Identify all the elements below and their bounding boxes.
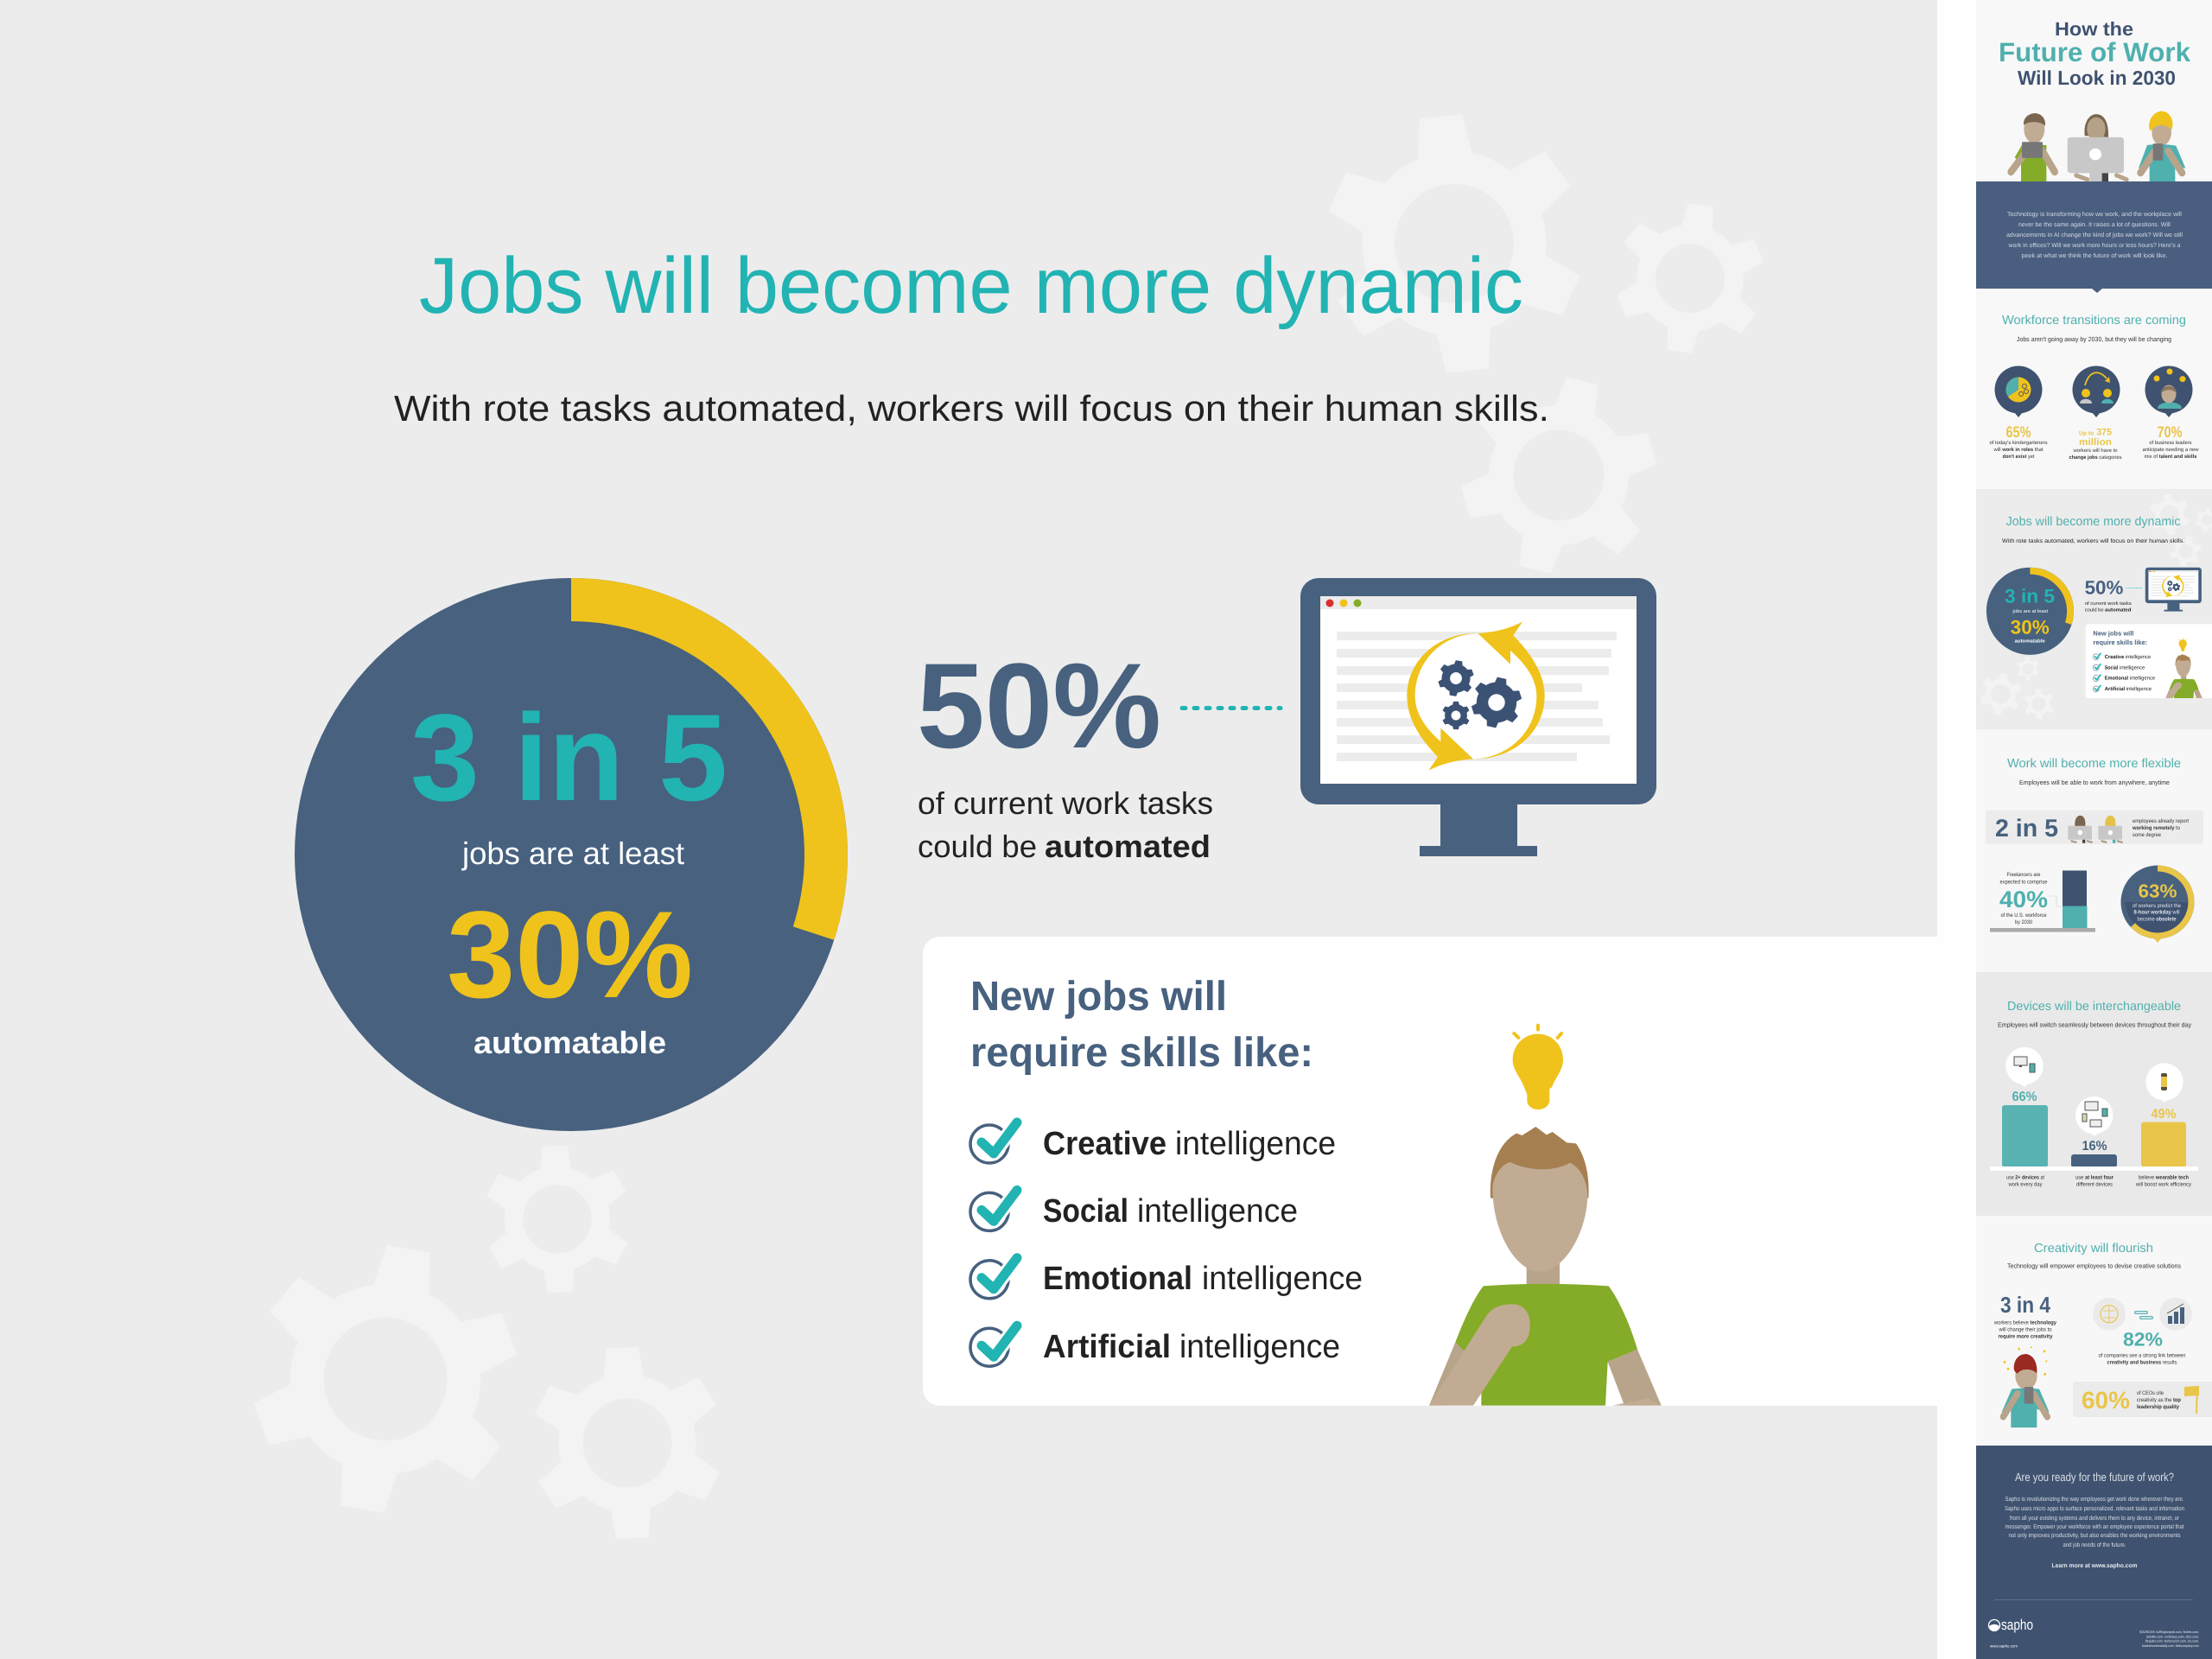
captions: devices: use at least four	[2075, 1175, 2113, 1181]
icon: monitor with gears	[1300, 578, 1656, 856]
donut: 3 in 5 jobs	[295, 578, 848, 1131]
stats: workforce: 65%	[2006, 423, 2031, 441]
icons: check marks	[970, 1122, 1017, 1366]
chart: freelancers 40%	[1990, 871, 2095, 932]
illustration: person with light bulb	[1429, 1026, 1662, 1406]
panel: footer call to action: Learn more at www.sapho.com	[2051, 1562, 2138, 1569]
skills list: Social	[1043, 1193, 1128, 1230]
title: Jobs will become more dynamic	[419, 242, 1523, 330]
stat: 50% automated: could be	[918, 829, 1037, 864]
donut text: jobs are at least	[461, 836, 684, 871]
donut text: automatable	[474, 1025, 666, 1060]
stat: 2 in 5 bar: some degree	[2133, 832, 2161, 838]
donut text: 30%	[447, 887, 693, 1024]
stats: workforce: anticipate needing a new	[2143, 447, 2199, 453]
captions: devices: work every day	[2008, 1182, 2043, 1187]
stat: 3 in 4	[1993, 1292, 2056, 1340]
stat: 82%: creativity and business results	[2107, 1360, 2177, 1365]
chart: freelancers 40%: of the U.S. workforce	[2001, 912, 2047, 918]
panel: thumbnail of dynamic jobs section: New jobs will	[2093, 630, 2133, 637]
stats: workforce: don't exist yet	[2003, 454, 2035, 460]
panel: thumbnail of dynamic jobs section: could be	[2085, 607, 2104, 613]
panel: intro text block: peek at what we think the future of work will look like.	[2022, 252, 2168, 259]
captions: devices: believe wearable tech	[2139, 1175, 2189, 1181]
chart: 63% ring: of workers predict the	[2133, 903, 2181, 909]
stat: 3 in 4: 3 in 4	[2000, 1292, 2050, 1318]
panel: intro text block: work in offices? Will we work more hours or less hours? Here's a	[2008, 242, 2181, 249]
panel: creativity will flourish: Technology will empower employees to devise creative solutions	[2007, 1262, 2181, 1270]
panel: footer call to action: Are you ready for the future of work?	[2015, 1471, 2174, 1484]
panel: work will become more flexible	[1976, 729, 2212, 972]
panel: intro text block	[1976, 181, 2212, 293]
stats: workforce: workers will have to	[2073, 448, 2118, 454]
stat: 60%: of CEOs cite	[2137, 1390, 2164, 1396]
panel: thumbnail of dynamic jobs section: Creative	[2105, 654, 2124, 660]
stats: workforce: 70%	[2157, 423, 2183, 441]
heading: new jobs will require skills: New jobs will	[970, 974, 1227, 1020]
background gears	[239, 104, 1770, 1543]
panel: thumbnail of dynamic jobs section: 30%	[2011, 616, 2050, 638]
captions: devices: use 2+ devices at	[2006, 1175, 2044, 1181]
panel: footer call to action	[1976, 1446, 2212, 1659]
stat: 2 in 5 bar	[1986, 810, 2203, 844]
panel: footer call to action: Sapho is revolutionizing the way employees get work done wherever they are.	[2005, 1496, 2184, 1503]
panel: thumbnail header and workforce section: How the	[2055, 18, 2133, 40]
icons: device bubbles	[2005, 1047, 2183, 1136]
panel: footer call to action: not only improves productivity, but also enables the working environments	[2008, 1532, 2181, 1539]
icon: job change bubble	[2072, 366, 2120, 417]
chart: freelancers 40%: Freelancers are	[2006, 872, 2041, 878]
chart: 63% ring: become obsolete	[2138, 917, 2177, 923]
panel: thumbnail of dynamic jobs section: 50%	[2085, 577, 2123, 598]
panel: footer call to action: and job needs of the future.	[2063, 1541, 2126, 1548]
stat: 50% automated	[917, 638, 1213, 864]
skills list: Artificial	[1043, 1329, 1171, 1365]
stat: 3 in 4: will change their jobs to	[1999, 1327, 2052, 1333]
white margin strip	[1937, 0, 1976, 1659]
bar chart: device usage: 16%	[2082, 1139, 2107, 1154]
stat: 2 in 5 bar: working remotely to	[2132, 825, 2180, 831]
chart: 63% ring: 8-hour workday will	[2134, 909, 2179, 916]
panel: devices will be interchangeable	[1976, 972, 2212, 1216]
illustration: creative woman	[2002, 1346, 2050, 1427]
stat: 60%: leadership quality	[2137, 1404, 2179, 1410]
panel: source infographic column	[1976, 0, 2212, 1659]
section: workforce transitions	[1989, 314, 2199, 461]
icons: brain, link, chart	[2093, 1298, 2192, 1331]
panel: thumbnail header and workforce section	[1976, 0, 2212, 489]
bar chart: device usage: 66%	[2012, 1090, 2037, 1104]
stat: 60%: 60%	[2082, 1387, 2130, 1414]
panel: thumbnail of dynamic jobs section: require skills like:	[2093, 639, 2147, 646]
sources: businessnewsdaily.com, fastcompany.com	[2142, 1643, 2200, 1648]
illustration: three workers	[2011, 111, 2185, 181]
panel: new jobs skills card	[923, 937, 2212, 1406]
donut text: 3 in 5	[410, 690, 728, 827]
panel: thumbnail of dynamic jobs section: With rote tasks automated, workers will focus on their human skills.	[2002, 537, 2184, 543]
panel: thumbnail of dynamic jobs section: Artificial	[2105, 686, 2125, 692]
skills list: intelligence	[1175, 1126, 1336, 1162]
stat: 82%: of companies see a strong link between	[2098, 1353, 2186, 1359]
heading: new jobs will require skills: require skills like:	[970, 1030, 1313, 1076]
stat: 3 in 4: require more creativity	[1998, 1334, 2053, 1340]
panel: thumbnail of dynamic jobs section: Jobs will become more dynamic	[2006, 514, 2181, 528]
panel: devices will be interchangeable: Devices will be interchangeable	[2007, 1000, 2181, 1014]
panel: thumbnail header and workforce section: Future of Work	[1999, 37, 2191, 67]
panel: intro text block: Technology is transforming how we work, and the workplace will	[2007, 211, 2182, 218]
stat: 2 in 5 bar: 2 in 5	[1995, 815, 2058, 842]
stat: 50% automated: automated	[1045, 829, 1211, 864]
panel: footer call to action: from all your existing systems and delivers them to any device, intranet, or	[2010, 1515, 2180, 1522]
panel: thumbnail of dynamic jobs section: 3 in 5	[2005, 585, 2055, 607]
panel: work will become more flexible: Employees will be able to work from anywhere, anytime	[2019, 779, 2170, 786]
panel: intro text block: advancements in AI change the kind of jobs we work? Will we still	[2006, 232, 2183, 238]
skills list: intelligence	[1202, 1261, 1363, 1297]
panel: footer call to action: www.sapho.com	[1990, 1644, 2018, 1649]
panel: thumbnail of dynamic jobs section: automatable	[2015, 638, 2045, 644]
icon: pie bubble	[1994, 366, 2043, 417]
panel: work will become more flexible: Work will become more flexible	[2007, 757, 2181, 771]
stat: 82%	[2098, 1329, 2186, 1365]
sources: flexjobs.com, techcrunch.com, cio.com,	[2145, 1639, 2199, 1643]
panel: creativity will flourish: Creativity will flourish	[2034, 1242, 2153, 1255]
skills list: Emotional	[1043, 1261, 1192, 1297]
bar chart: device usage	[1990, 1090, 2198, 1171]
panel: thumbnail of dynamic jobs section: intelligence	[2126, 654, 2151, 660]
stat: 60%	[2073, 1382, 2212, 1417]
stats: workforce: Up to 375	[2079, 427, 2112, 437]
stat: 2 in 5 bar: employees already report	[2133, 818, 2189, 824]
stats: workforce	[1989, 423, 2199, 461]
skills list: intelligence	[1179, 1329, 1340, 1365]
bar chart: device usage: 49%	[2152, 1107, 2177, 1122]
dotted connector	[1182, 706, 1281, 710]
panel: intro text block: never be the same again. It raises a lot of questions. Will	[2018, 221, 2171, 228]
stats: workforce: of today's kindergarteners	[1989, 440, 2048, 446]
stats: workforce: will work in roles that	[1993, 447, 2044, 453]
subtitle: With rote tasks automated, workers will focus on their human skills.	[394, 388, 1549, 429]
sources: deloitte.com, mckinsey.com, cbre.com,	[2146, 1634, 2199, 1638]
stats: workforce: of business leaders	[2150, 440, 2191, 446]
stat: 3 in 4: workers believe technology	[1993, 1320, 2056, 1325]
stat: 50% automated: of current work tasks	[918, 785, 1213, 821]
skills list: Creative	[1043, 1126, 1166, 1162]
logo: sapho	[1989, 1617, 2033, 1633]
chart: freelancers 40%: by 2030	[2015, 919, 2032, 925]
panel: thumbnail header and workforce section: Will Look in 2030	[2018, 67, 2176, 89]
skills list: intelligence	[1137, 1193, 1298, 1230]
icon: skills bubble	[2145, 366, 2193, 417]
panel: thumbnail of dynamic jobs section: jobs are at least	[2012, 608, 2048, 613]
panel: thumbnail of dynamic jobs section: intelligence	[2130, 676, 2155, 681]
panel: thumbnail of dynamic jobs section: intelligence	[2120, 664, 2145, 671]
panel: thumbnail of dynamic jobs section: Emotional	[2105, 676, 2128, 681]
chart: freelancers 40%: 40%	[1999, 887, 2048, 912]
stats: workforce: million	[2079, 437, 2112, 448]
section: workforce transitions: Jobs aren't going away by 2030, but they will be changing	[2017, 335, 2171, 343]
panel: creativity will flourish	[1976, 1216, 2212, 1446]
stats: workforce: mix of talent and skills	[2145, 454, 2197, 460]
heading: new jobs will require skills	[970, 974, 1313, 1076]
skills list	[1043, 1126, 1363, 1365]
captions: devices	[2006, 1175, 2192, 1187]
section: workforce transitions: Workforce transitions are coming	[2002, 314, 2186, 327]
panel: thumbnail of dynamic jobs section: of current work tasks	[2085, 601, 2132, 606]
captions: devices: different devices	[2076, 1182, 2113, 1187]
panel: footer call to action: messenger. Empower your workforce with an employee experience portal that	[2005, 1523, 2184, 1530]
panel: devices will be interchangeable: Employees will switch seamlessly between devices throughout their day	[1998, 1021, 2191, 1029]
stat: 60%: creativity as the top	[2137, 1397, 2181, 1403]
panel: thumbnail of dynamic jobs section: automated	[2105, 607, 2131, 613]
chart: 63% ring: 63%	[2138, 880, 2177, 902]
stat: 82%: 82%	[2123, 1329, 2163, 1350]
captions: devices: will boost work efficiency	[2135, 1182, 2192, 1187]
chart: 63% ring	[2120, 866, 2195, 943]
panel: thumbnail of dynamic jobs section: Social	[2105, 664, 2118, 671]
panel: thumbnail of dynamic jobs section: intelligence	[2126, 686, 2152, 692]
logo: sapho: sapho	[2001, 1617, 2033, 1633]
stat: 50% automated: 50%	[917, 638, 1161, 773]
donut text	[410, 690, 728, 1060]
panel: footer call to action: Sapho uses micro apps to surface personalized, relevant tasks and information	[2005, 1505, 2184, 1512]
sources	[2139, 1630, 2200, 1648]
sources: SOURCES: huffingtonpost.com, forbes.com,	[2139, 1630, 2199, 1634]
chart: freelancers 40%: expected to comprise	[1999, 880, 2048, 885]
stats: workforce: change jobs categories	[2069, 454, 2122, 461]
panel: thumbnail of dynamic jobs section	[1986, 516, 2212, 698]
